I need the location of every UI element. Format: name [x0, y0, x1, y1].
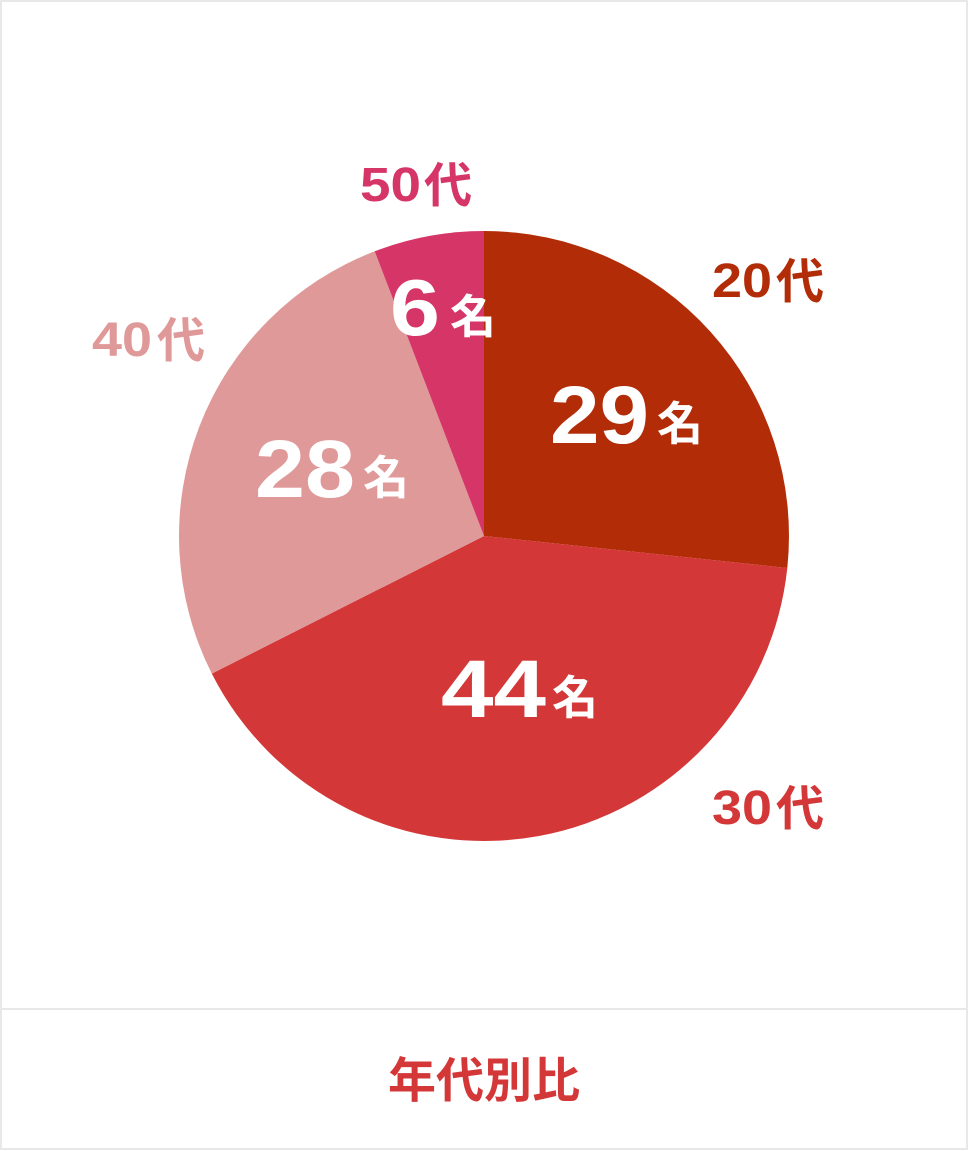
slice: 40s: [179, 251, 484, 674]
pie chart: age distribution: [179, 231, 789, 841]
value: 28 people: [255, 424, 409, 515]
label: 20s: [712, 242, 824, 312]
label: 50s: [360, 146, 472, 216]
value: 44 people: 44: [441, 644, 546, 735]
label: 40s: [92, 301, 205, 371]
label: 40s: 40: [92, 314, 152, 367]
value: 28 people: 28: [255, 424, 355, 515]
value: 29 people: 29: [550, 370, 649, 461]
label: 50s: 代: [424, 146, 472, 216]
label: 30s: 30: [712, 782, 772, 835]
label: 40s: 代: [157, 301, 205, 371]
value: 6 people: [390, 263, 496, 352]
value: 44 people: [441, 644, 598, 735]
value: 28 people: 名: [363, 442, 409, 508]
value: 6 people: 6: [390, 263, 440, 352]
label: 30s: [712, 769, 824, 839]
chart title: 年代別比: [388, 1041, 580, 1111]
label: 50s: 50: [360, 159, 421, 212]
label: 30s: 代: [776, 769, 824, 839]
slice: 50s: [375, 231, 484, 536]
value: 44 people: 名: [552, 662, 598, 728]
value: 6 people: 名: [450, 281, 496, 347]
slice: 20s: [484, 231, 789, 568]
value: 29 people: 名: [657, 388, 703, 454]
label: 20s: 代: [776, 242, 824, 312]
slice: 30s: [212, 536, 787, 841]
value: 29 people: [550, 370, 703, 461]
label: 20s: 20: [712, 255, 772, 308]
